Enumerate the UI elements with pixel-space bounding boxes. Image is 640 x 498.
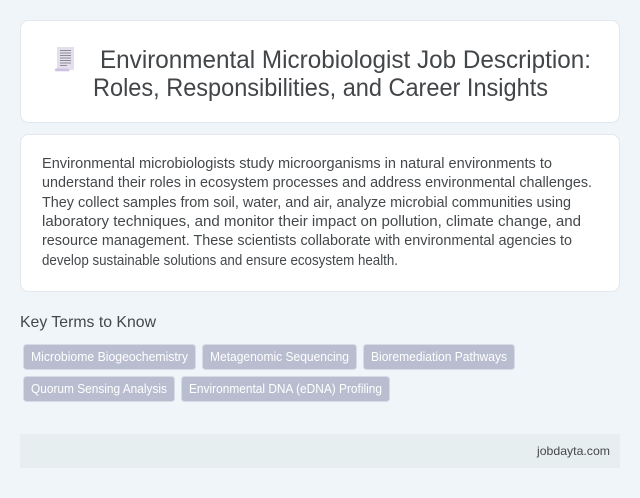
title: [93, 46, 591, 102]
description text: They collect samples from soil, water, and air, analyze microbial communities using: [42, 195, 571, 211]
panel: description card: [20, 134, 620, 292]
description text: laboratory techniques, and monitor their impact on pollution, climate change, and: [42, 214, 581, 230]
tags: key terms: [24, 344, 514, 402]
tag: metagenomic sequencing: [202, 344, 356, 370]
description text: Environmental microbiologists study microorganisms in natural environments to: [42, 156, 552, 172]
tag: environmental dna profiling: [182, 376, 390, 402]
tag: quorum sensing analysis: [24, 376, 174, 402]
description text: develop sustainable solutions and ensure ecosystem health.: [42, 253, 398, 269]
footer source: jobdayta.com: [536, 444, 610, 458]
heading: key terms: Key Terms to Know: [20, 314, 156, 331]
panel: title card: [20, 20, 620, 122]
tag: microbiome biogeochemistry: Microbiome Biogeochemistry: [31, 350, 189, 364]
title: Roles, Responsibilities, and Career Insights: [93, 74, 548, 102]
footer bar: [20, 434, 620, 468]
tag: bioremediation pathways: Bioremediation Pathways: [371, 350, 507, 364]
tag: bioremediation pathways: [364, 344, 514, 370]
title: Environmental Microbiologist Job Description:: [100, 46, 591, 74]
description text: resource management. These scientists collaborate with environmental agencies to: [42, 233, 572, 249]
tag: quorum sensing analysis: Quorum Sensing Analysis: [31, 382, 167, 396]
tag: metagenomic sequencing: Metagenomic Sequencing: [210, 350, 349, 364]
description text: [42, 156, 592, 269]
tag: microbiome biogeochemistry: [24, 344, 196, 370]
icon: document scroll: [54, 47, 74, 72]
description text: understand their roles in ecosystem processes and address environmental challenges.: [42, 175, 592, 191]
tag: environmental dna profiling: Environmental DNA (eDNA) Profiling: [189, 382, 382, 396]
